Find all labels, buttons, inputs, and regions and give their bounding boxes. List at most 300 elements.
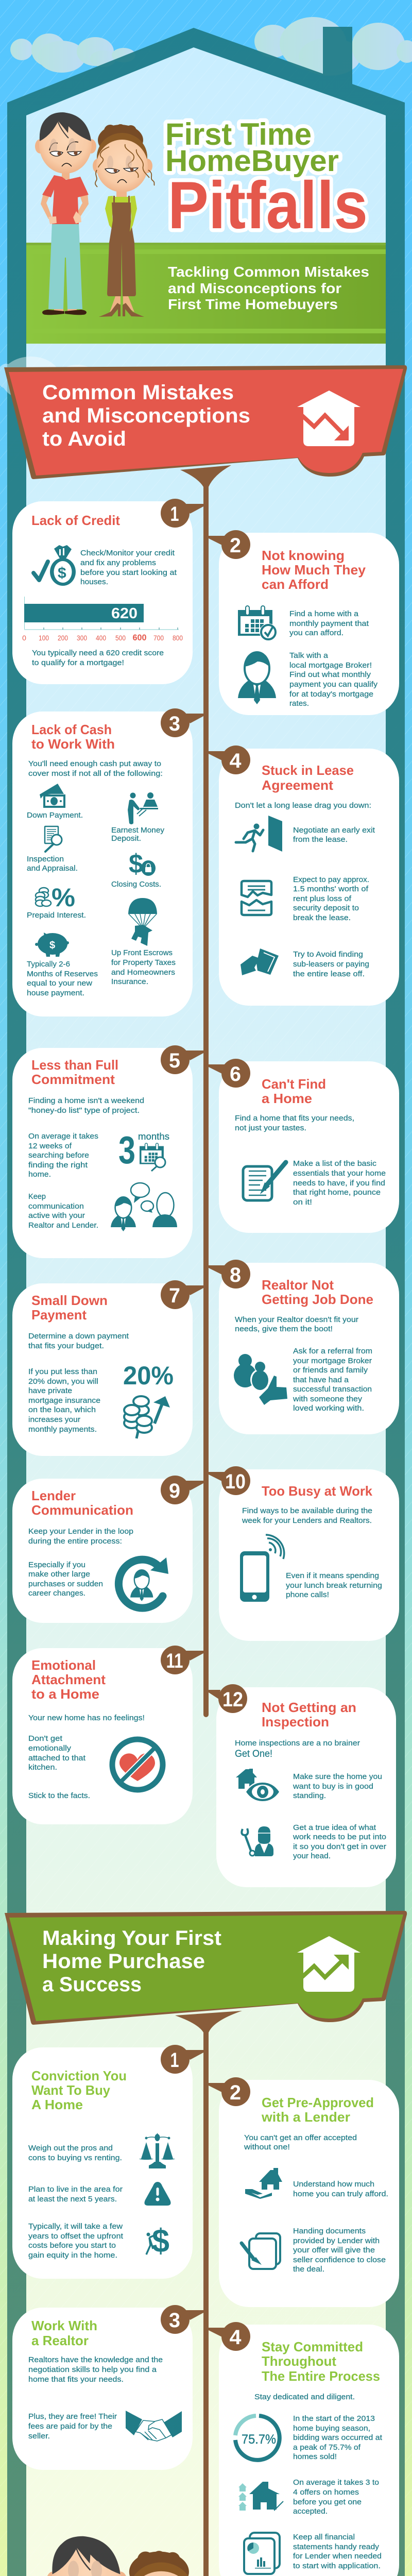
man illustration bottom: [46, 2536, 127, 2576]
icon: financial statements: [244, 2533, 280, 2574]
label earnest money: [111, 826, 165, 843]
bidding wars text: a peak of 75.7% of: [293, 2443, 361, 2452]
credit score bar chart: 500: [115, 634, 126, 642]
heading: Can't Find: [262, 1076, 326, 1092]
heading: to Work With: [31, 736, 115, 752]
intro text: needs, give them the boot!: [235, 1325, 333, 1333]
number badge 6: [209, 1059, 250, 1088]
five years text: at least the next 5 years.: [28, 2195, 117, 2204]
number badge 2: 2: [230, 2081, 241, 2104]
broker text: [289, 651, 378, 708]
offers text: On average it takes 3 to: [293, 2478, 379, 2487]
heading: a Realtor: [31, 2333, 89, 2348]
upfront costs text: years to offset the upfront: [28, 2232, 124, 2241]
panel: lack of cash: [12, 708, 203, 1016]
title: First Time: [165, 117, 312, 151]
section sign: common mistakes: [4, 365, 407, 479]
check credit text: before you start looking at: [80, 568, 177, 577]
heading: Inspection: [262, 1714, 329, 1730]
panel: lack of credit: [12, 499, 203, 684]
monthly payment text: [289, 609, 369, 637]
label earnest money: Earnest Money: [111, 826, 165, 835]
number badge 5: 5: [169, 1049, 180, 1072]
icon: torn contract: [242, 881, 271, 915]
icon: calendar with magnifier: [140, 1143, 165, 1171]
mortgage insurance text: monthly payments.: [28, 1425, 97, 1434]
number badge 8: [209, 1260, 250, 1289]
number badge 3: 3: [169, 2309, 180, 2332]
number badge 8: 8: [230, 1264, 241, 1286]
heading: [262, 1076, 326, 1106]
heading: [262, 1700, 356, 1730]
panel: cant find a home: [209, 1059, 399, 1233]
heading: [31, 722, 115, 752]
no feelings text: Your new home has no feelings!: [28, 1714, 145, 1722]
heading: A Home: [31, 2097, 83, 2112]
donut chart 75.7 percent: [235, 2416, 280, 2460]
essentials text: Make a list of the basic: [293, 1159, 377, 1168]
credit score bar chart: 600: [133, 633, 146, 642]
icon: check and money bag: $: [58, 565, 66, 582]
heading: [262, 548, 366, 592]
mortgage insurance text: increases your: [28, 1415, 80, 1424]
label reserves: [27, 960, 98, 997]
check credit text: houses.: [80, 578, 108, 586]
heading: Too Busy at Work: [262, 1483, 373, 1499]
check credit text: [80, 549, 177, 586]
panel: less than full commitment: [12, 1045, 203, 1258]
credit score bar chart: 400: [96, 634, 106, 642]
truly afford text: Understand how much: [293, 2180, 374, 2189]
icon: hand with money: [241, 948, 279, 975]
five years text: Plan to live in the area for: [28, 2185, 123, 2194]
panel: too busy at work: [209, 1466, 399, 1641]
timeline stem 2: [175, 2011, 242, 2576]
stat: three months: months: [138, 1131, 169, 1142]
pros and cons text: [28, 2144, 122, 2162]
twelve weeks text: On average it takes: [28, 1132, 98, 1141]
label inspection: Inspection: [27, 855, 64, 863]
mortgage insurance text: have private: [28, 1386, 72, 1395]
number badge 12: 12: [222, 1688, 243, 1711]
heading: Not knowing: [262, 548, 345, 563]
section heading 2: [42, 1927, 221, 1996]
mortgage insurance text: [28, 1367, 100, 1434]
knowledge text: negotiation skills to help you find a: [28, 2365, 157, 2374]
label earnest money: Deposit.: [111, 834, 141, 843]
icon: crossed heart: [112, 1739, 163, 1790]
icon: documents and pen: [242, 2233, 280, 2269]
heading: Lack of Credit: [31, 513, 120, 528]
lunch break text: Even if it means spending: [286, 1571, 379, 1580]
icon: check and money bag: [33, 545, 76, 586]
section heading 1: to Avoid: [42, 428, 126, 450]
icon: smartphone with signal: [240, 1535, 284, 1602]
heading: Stay Committed: [262, 2339, 363, 2354]
true idea text: it so you don't get in over: [293, 1842, 386, 1851]
intro text: cover most if not all of the following:: [28, 769, 163, 778]
clouds behind sign: [0, 357, 95, 401]
kitchen text: emotionally: [28, 1744, 72, 1753]
heading: can Afford: [262, 577, 329, 592]
heading: [31, 1657, 106, 1702]
monthly payment text: Find a home with a: [289, 609, 359, 618]
section heading 1: [42, 381, 250, 450]
twelve weeks text: home.: [28, 1170, 51, 1179]
intro text: Home inspections are a no brainer: [235, 1739, 360, 1748]
credit score bar chart: 200: [58, 634, 68, 642]
twelve weeks text: searching before: [28, 1151, 89, 1160]
heading: [31, 1057, 118, 1087]
icon: house and eye: [236, 1769, 281, 1803]
section heading 2: a Success: [42, 1973, 142, 1996]
intro text: Determine a down payment: [28, 1332, 129, 1341]
timeline stem 1: [180, 465, 231, 1717]
number badge 4: [209, 745, 250, 774]
credit score note: You typically need a 620 credit score: [32, 649, 164, 657]
icon: people and thumbs up: [234, 1354, 288, 1406]
heading: Payment: [31, 1307, 87, 1323]
essentials text: [293, 1159, 386, 1207]
credit score bar chart: 100: [39, 634, 49, 642]
referral text: that have had a: [293, 1376, 349, 1384]
bidding wars text: [293, 2414, 383, 2461]
woman illustration top: [93, 124, 154, 317]
subtitle: Tackling Common Mistakes: [168, 264, 369, 280]
icon: prepaid coins percent: [36, 883, 75, 912]
icon: balance scale: [139, 2133, 175, 2168]
panel: emotional attachment: [12, 1646, 203, 1824]
heading: [261, 2095, 374, 2125]
broker text: rates.: [289, 699, 309, 708]
credit score bar chart: 620: [111, 605, 138, 622]
communication text: active with your: [28, 1211, 85, 1220]
heading: a Home: [262, 1091, 312, 1106]
icon: coins with rising arrow: [124, 1396, 170, 1438]
icon: hand holding house: [245, 2168, 282, 2199]
icon: runner exiting door: [236, 816, 282, 852]
early exit text: Negotiate an early exit: [293, 826, 375, 835]
credit score note: to qualify for a mortgage!: [32, 658, 124, 667]
free realtors text: [28, 2412, 117, 2441]
broker text: Talk with a: [289, 651, 329, 660]
kitchen text: [28, 1734, 86, 1772]
stat: three months: 3: [118, 1128, 135, 1172]
intro text: not just your tastes.: [235, 1124, 306, 1132]
heading: with a Lender: [261, 2109, 350, 2125]
heading: [262, 762, 354, 793]
lease cost text: 1.5 months' worth of: [293, 885, 369, 893]
sub-lease text: Try to Avoid finding: [293, 950, 363, 959]
essentials text: that right home, pounce: [293, 1188, 381, 1197]
twelve weeks text: 12 weeks of: [28, 1142, 72, 1150]
intro text: [235, 1739, 360, 1759]
handing documents text: the deal.: [293, 2265, 324, 2274]
donut chart 75.7 percent: 75.7%: [242, 2432, 276, 2447]
intro text: [28, 1332, 129, 1350]
intro text: [235, 1315, 358, 1333]
heading: Not Getting an: [262, 1700, 356, 1715]
heading: Attachment: [31, 1672, 106, 1687]
broker text: Find out what monthly: [289, 670, 371, 679]
pros and cons text: Weigh out the pros and: [28, 2144, 113, 2153]
label escrows: Up Front Escrows: [111, 948, 173, 957]
label inspection: and Appraisal.: [27, 864, 78, 873]
stat: 20 percent: 20%: [123, 1361, 174, 1390]
number badge 3: [161, 2305, 203, 2334]
referral text: Ask for a referral from: [293, 1347, 372, 1355]
upfront costs text: Typically, it will take a few: [28, 2222, 123, 2231]
good standing text: [293, 1772, 382, 1800]
heading: [31, 2318, 97, 2348]
intro text: [242, 1506, 372, 1525]
true idea text: [293, 1823, 386, 1860]
intro text: Find ways to be available during the: [242, 1506, 372, 1515]
mortgage insurance text: mortgage insurance: [28, 1396, 100, 1405]
woman illustration bottom holding stem: [123, 2551, 210, 2576]
heading: Small Down: [31, 1293, 108, 1308]
heading: [31, 1488, 133, 1518]
label prepaid interest: Prepaid Interest.: [27, 911, 86, 920]
section heading 1: Common Mistakes: [42, 381, 234, 404]
good standing text: Make sure the home you: [293, 1772, 382, 1781]
free realtors text: Plus, they are free! Their: [28, 2412, 117, 2421]
icon: inspection magnifier: [45, 826, 62, 852]
knowledge text: home that fits your needs.: [28, 2375, 124, 2384]
monthly payment text: monthly payment that: [289, 619, 369, 628]
heading: Want To Buy: [31, 2082, 111, 2098]
kitchen text: Don't get: [28, 1734, 63, 1743]
panel: conviction you want to buy a home: [12, 2045, 203, 2279]
number badge 2: 2: [230, 534, 241, 557]
grass band: [26, 243, 386, 344]
lease cost text: Expect to pay approx.: [293, 875, 369, 884]
subtitle: First Time Homebuyers: [168, 296, 338, 312]
offers text: 4 offers on homes: [293, 2488, 359, 2497]
early exit text: [293, 826, 375, 844]
true idea text: Get a true idea of what: [293, 1823, 376, 1832]
upfront costs text: [28, 2222, 124, 2260]
icon: offers houses: [238, 2482, 283, 2511]
sub-lease text: sub-leasers or paying: [293, 960, 369, 969]
heading: [31, 1293, 108, 1323]
referral text: or friends and family: [293, 1366, 368, 1375]
number badge 5: [161, 1045, 203, 1074]
mortgage insurance text: on the loan, which: [28, 1405, 96, 1414]
icon: warning triangle: [144, 2182, 171, 2206]
credit score bar chart: [22, 597, 183, 642]
number badge 7: [161, 1280, 203, 1309]
label reserves: Typically 2-6: [27, 960, 70, 969]
lease cost text: rent plus loss of: [293, 894, 352, 903]
knowledge text: Realtors have the knowledge and the: [28, 2355, 163, 2364]
section heading 1: and Misconceptions: [42, 404, 250, 427]
free realtors text: fees are paid for by the: [28, 2422, 112, 2431]
broker text: for at today's mortgage: [289, 690, 373, 699]
bidding wars text: bidding wars occurred at: [293, 2433, 383, 2442]
free realtors text: seller.: [28, 2432, 50, 2441]
essentials text: needs to have, if you find: [293, 1179, 385, 1188]
number badge 11: [161, 1646, 203, 1674]
heading: Conviction You: [31, 2068, 127, 2083]
label escrows: [111, 948, 176, 986]
upfront costs text: costs before you start to: [28, 2241, 116, 2250]
heading: Throughout: [262, 2353, 336, 2369]
lunch break text: your lunch break returning: [286, 1581, 382, 1590]
label escrows: and Homeowners: [111, 968, 175, 977]
intro text: Find a home that fits your needs,: [235, 1114, 354, 1123]
statements text: [293, 2533, 382, 2570]
intro text: that fits your budget.: [28, 1342, 104, 1350]
intro text: during the entire process:: [28, 1537, 122, 1546]
lunch break text: [286, 1571, 382, 1599]
number badge 3: 3: [169, 713, 180, 735]
large purchases text: [28, 1561, 103, 1598]
referral text: your mortgage Broker: [293, 1357, 372, 1365]
section sign: making your first home purchase: [5, 1911, 407, 2025]
section heading 2: Home Purchase: [42, 1950, 205, 1973]
number badge 2: [209, 2077, 250, 2106]
intro text: Finding a home isn't a weekend: [28, 1096, 144, 1105]
icon: banknotes: [40, 784, 65, 808]
pros and cons text: cons to buying vs renting.: [28, 2154, 122, 2162]
icon: piggy bank: $: [49, 940, 55, 951]
panel: stay committed throughout: [209, 2322, 399, 2576]
credit score bar chart: 700: [153, 634, 164, 642]
truly afford text: home you can truly afford.: [293, 2190, 388, 2198]
five years text: [28, 2185, 123, 2204]
bidding wars text: homes sold!: [293, 2452, 337, 2461]
number badge 2: [209, 530, 250, 559]
intro text: Get One!: [235, 1749, 272, 1759]
credit score bar chart: 300: [77, 634, 87, 642]
good standing text: want to buy is in good: [293, 1782, 373, 1791]
communication text: [28, 1192, 98, 1230]
large purchases text: Especially if you: [28, 1561, 85, 1569]
icon: closing costs lock: $: [129, 849, 143, 879]
intro text: Keep your Lender in the loop: [28, 1527, 133, 1536]
icon: person in cycle arrow: [118, 1557, 168, 1608]
title: HomeBuyer: [165, 144, 339, 178]
referral text: successful transaction: [293, 1385, 372, 1394]
icon: climber on dollar sign: $: [152, 2222, 169, 2259]
number badge 12: [209, 1684, 247, 1713]
panel: not knowing how much they can afford: [209, 530, 399, 715]
heading: Stuck in Lease: [262, 762, 354, 778]
communication text: communication: [28, 1202, 84, 1211]
number badge 1: 1: [170, 2049, 179, 2072]
heading: Commitment: [31, 1072, 115, 1087]
icon: handshake: [126, 2411, 182, 2441]
sub-lease text: [293, 950, 369, 978]
facts text: Stick to the facts.: [28, 1791, 90, 1800]
statements text: for Lender when needed: [293, 2552, 382, 2561]
lunch break text: phone calls!: [286, 1590, 329, 1599]
label inspection: [27, 855, 78, 873]
check credit text: Check/Monitor your credit: [80, 549, 175, 557]
intro text: [28, 759, 163, 778]
icon: parachute house: [128, 898, 157, 946]
number badge 4: [209, 2322, 250, 2351]
referral text: loved working with.: [293, 1404, 364, 1413]
intro text: week for your Lenders and Realtors.: [242, 1516, 372, 1525]
intro text: [235, 1114, 354, 1132]
handing documents text: your offer will give the: [293, 2246, 375, 2255]
lease cost text: [293, 875, 369, 922]
twelve weeks text: [28, 1132, 98, 1179]
monthly payment text: you can afford.: [289, 629, 344, 637]
panel: not getting an inspection: [209, 1684, 396, 1887]
title: Pitfalls: [168, 167, 368, 243]
intro text: [28, 1096, 144, 1115]
label reserves: equal to your new: [27, 979, 92, 988]
communication text: Realtor and Lender.: [28, 1221, 98, 1230]
mortgage insurance text: 20% down, you will: [28, 1377, 98, 1386]
label reserves: Months of Reserves: [27, 970, 98, 978]
bidding wars text: In the start of the 2013: [293, 2414, 375, 2423]
subtitle: [168, 264, 369, 312]
statements text: to start with application.: [293, 2562, 381, 2570]
heading: [262, 2339, 380, 2384]
heading: Get Pre-Approved: [262, 2095, 374, 2110]
subtitle: and Misconceptions for: [168, 280, 341, 296]
intro text: Stay dedicated and diligent.: [254, 2393, 355, 2401]
number badge 3: [161, 708, 203, 737]
heading: The Entire Process: [262, 2368, 380, 2384]
lease cost text: break the lease.: [293, 913, 351, 922]
icon: checklist and pencil: [243, 1162, 286, 1200]
credit score bar chart: 0: [22, 634, 26, 642]
mortgage insurance text: If you put less than: [28, 1367, 97, 1376]
essentials text: essentials that your home: [293, 1169, 386, 1178]
heading: Lack of Cash: [31, 722, 112, 737]
heading: Agreement: [262, 777, 333, 793]
number badge 9: 9: [169, 1480, 180, 1502]
offers text: [293, 2478, 379, 2516]
icon: prepaid coins percent: %: [52, 883, 75, 912]
heading: to a Home: [31, 1686, 99, 1702]
title: [165, 117, 368, 243]
heading: Getting Job Done: [262, 1292, 373, 1307]
broker text: payment you can qualify: [289, 680, 378, 689]
intro text: [28, 1527, 133, 1546]
intro text: [244, 2133, 357, 2151]
icon: house with falling arrow: [297, 391, 360, 446]
true idea text: work needs to be put into: [293, 1833, 386, 1841]
panel: work with a realtor: [12, 2305, 203, 2470]
panel: small down payment: [12, 1280, 203, 1456]
heading: Communication: [31, 1502, 133, 1518]
number badge 10: [209, 1466, 250, 1495]
icon: calendar with check: [238, 606, 277, 641]
communication text: Keep: [28, 1192, 46, 1201]
heading: [262, 1277, 373, 1307]
section heading 2: Making Your First: [42, 1927, 221, 1950]
statements text: Keep all financial: [293, 2533, 355, 2541]
man illustration top: [35, 112, 96, 315]
intro text: without one!: [244, 2143, 290, 2151]
clouds: top right: [254, 17, 412, 76]
large purchases text: career changes.: [28, 1589, 85, 1598]
label closing costs: Closing Costs.: [111, 880, 161, 889]
intro text: When your Realtor doesn't fit your: [235, 1315, 358, 1324]
number badge 6: 6: [230, 1063, 241, 1086]
credit score bar chart: 800: [173, 634, 183, 642]
panel: lender communication: [12, 1476, 203, 1623]
twelve weeks text: finding the right: [28, 1161, 88, 1170]
referral text: [293, 1347, 372, 1413]
kitchen text: attached to that: [28, 1754, 86, 1762]
